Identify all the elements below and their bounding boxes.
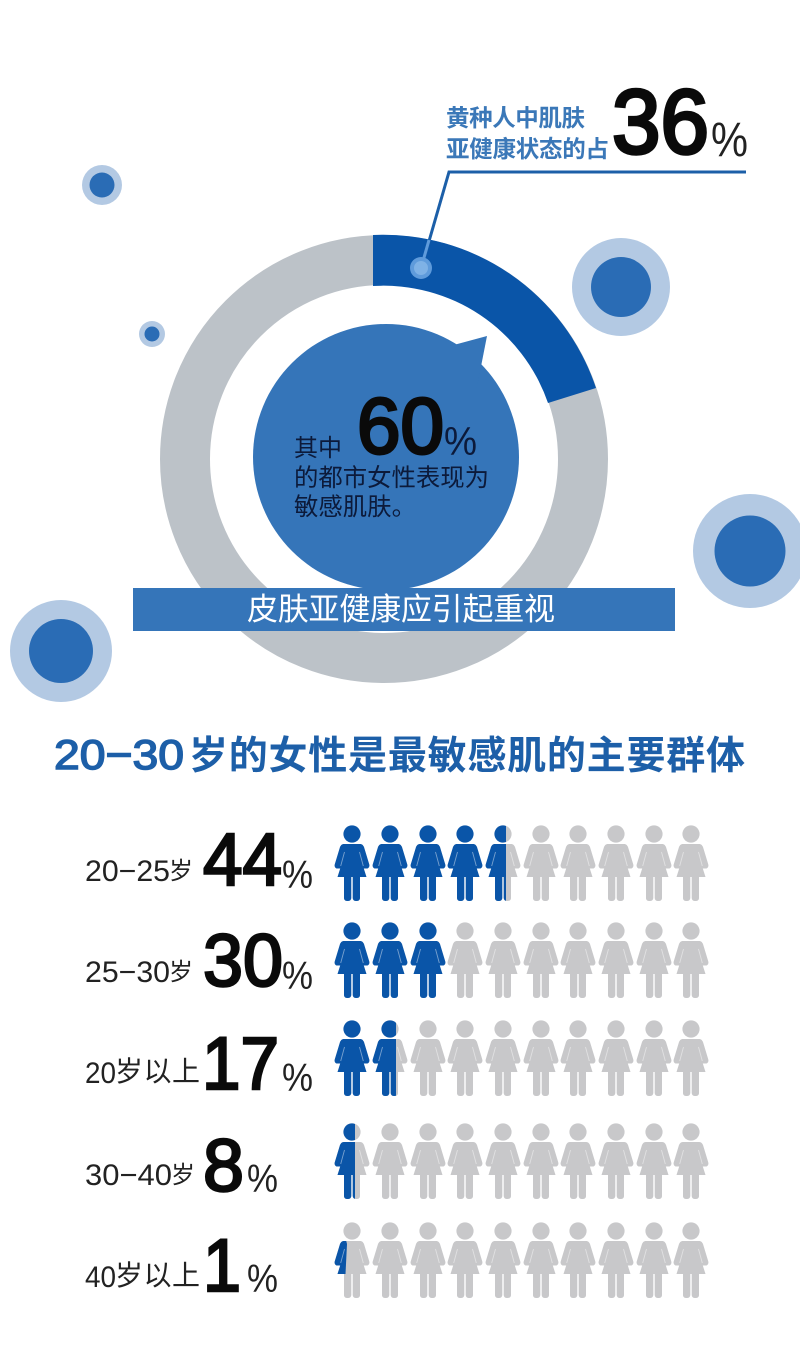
row label: over 40: 40 xyxy=(85,1261,116,1294)
row label: 30-40: 8 xyxy=(203,1124,244,1207)
decorative circle: lower left xyxy=(10,600,112,702)
speech bubble: 60 percent: 其中 xyxy=(294,435,342,462)
banner heading xyxy=(133,588,675,631)
pictogram row: 44 percent xyxy=(335,825,708,901)
row label: 20-25: 44 xyxy=(203,818,282,901)
row label: 30-40: 岁 xyxy=(171,1162,195,1189)
callout text: 36 percent: 36 xyxy=(612,72,709,173)
donut chart: 36 percent share xyxy=(185,235,596,658)
callout text: 36 percent: 亚健康状态的占 xyxy=(446,136,609,162)
row label: over 40: 岁以上 xyxy=(115,1260,200,1291)
row label: under 20 xyxy=(85,1022,313,1105)
callout text: 36 percent: % xyxy=(711,114,748,167)
row label: 25-30: 30 xyxy=(203,919,283,1002)
decorative circle: upper left xyxy=(82,165,122,205)
decorative circle: upper right xyxy=(572,238,670,336)
speech bubble: 60 percent: % xyxy=(444,420,477,464)
pictogram row: 8 percent xyxy=(335,1123,708,1199)
row label: 25-30: 25−30 xyxy=(85,956,170,989)
callout text: 36 percent: 黄种人中肌肤 xyxy=(446,105,586,131)
row label: 30-40: 30−40 xyxy=(85,1159,172,1192)
row label: over 40 xyxy=(85,1224,278,1307)
row label: under 20: 岁以上 xyxy=(115,1056,200,1087)
row label: over 40: % xyxy=(247,1258,278,1301)
pictogram row: 1 percent xyxy=(335,1222,708,1298)
callout leader line xyxy=(410,172,746,279)
row label: 30-40: % xyxy=(247,1158,278,1201)
row label: 30-40 xyxy=(85,1124,278,1207)
callout text: 36 percent xyxy=(446,72,748,173)
row label: 20-25: 岁 xyxy=(169,858,193,885)
section title: 20−30 xyxy=(54,731,184,778)
speech bubble: 60 percent: 的都市女性表现为 xyxy=(294,465,489,492)
speech bubble: 60 percent: 60 xyxy=(357,381,444,470)
row label: under 20: 17 xyxy=(202,1022,279,1105)
row label: 25-30 xyxy=(85,919,313,1002)
row label: 20-25: % xyxy=(282,854,313,897)
decorative circle: small left xyxy=(139,321,165,347)
banner heading: 皮肤亚健康应引起重视 xyxy=(247,592,555,627)
row label: 25-30: % xyxy=(282,955,313,998)
pictogram row: 17 percent xyxy=(335,1020,708,1096)
row label: 25-30: 岁 xyxy=(169,959,193,986)
row label: under 20: % xyxy=(282,1057,313,1100)
row label: 20-25 xyxy=(85,818,313,901)
pictogram row: 30 percent xyxy=(335,922,708,998)
speech bubble: 60 percent xyxy=(253,324,519,590)
decorative circle: right edge xyxy=(693,494,800,608)
row label: under 20: 20 xyxy=(85,1057,116,1090)
section title: 岁的女性是最敏感肌的主要群体 xyxy=(189,735,745,778)
row label: 20-25: 20−25 xyxy=(85,855,170,888)
row label: over 40: 1 xyxy=(203,1224,241,1307)
speech bubble: 60 percent: 敏感肌肤。 xyxy=(294,494,416,521)
